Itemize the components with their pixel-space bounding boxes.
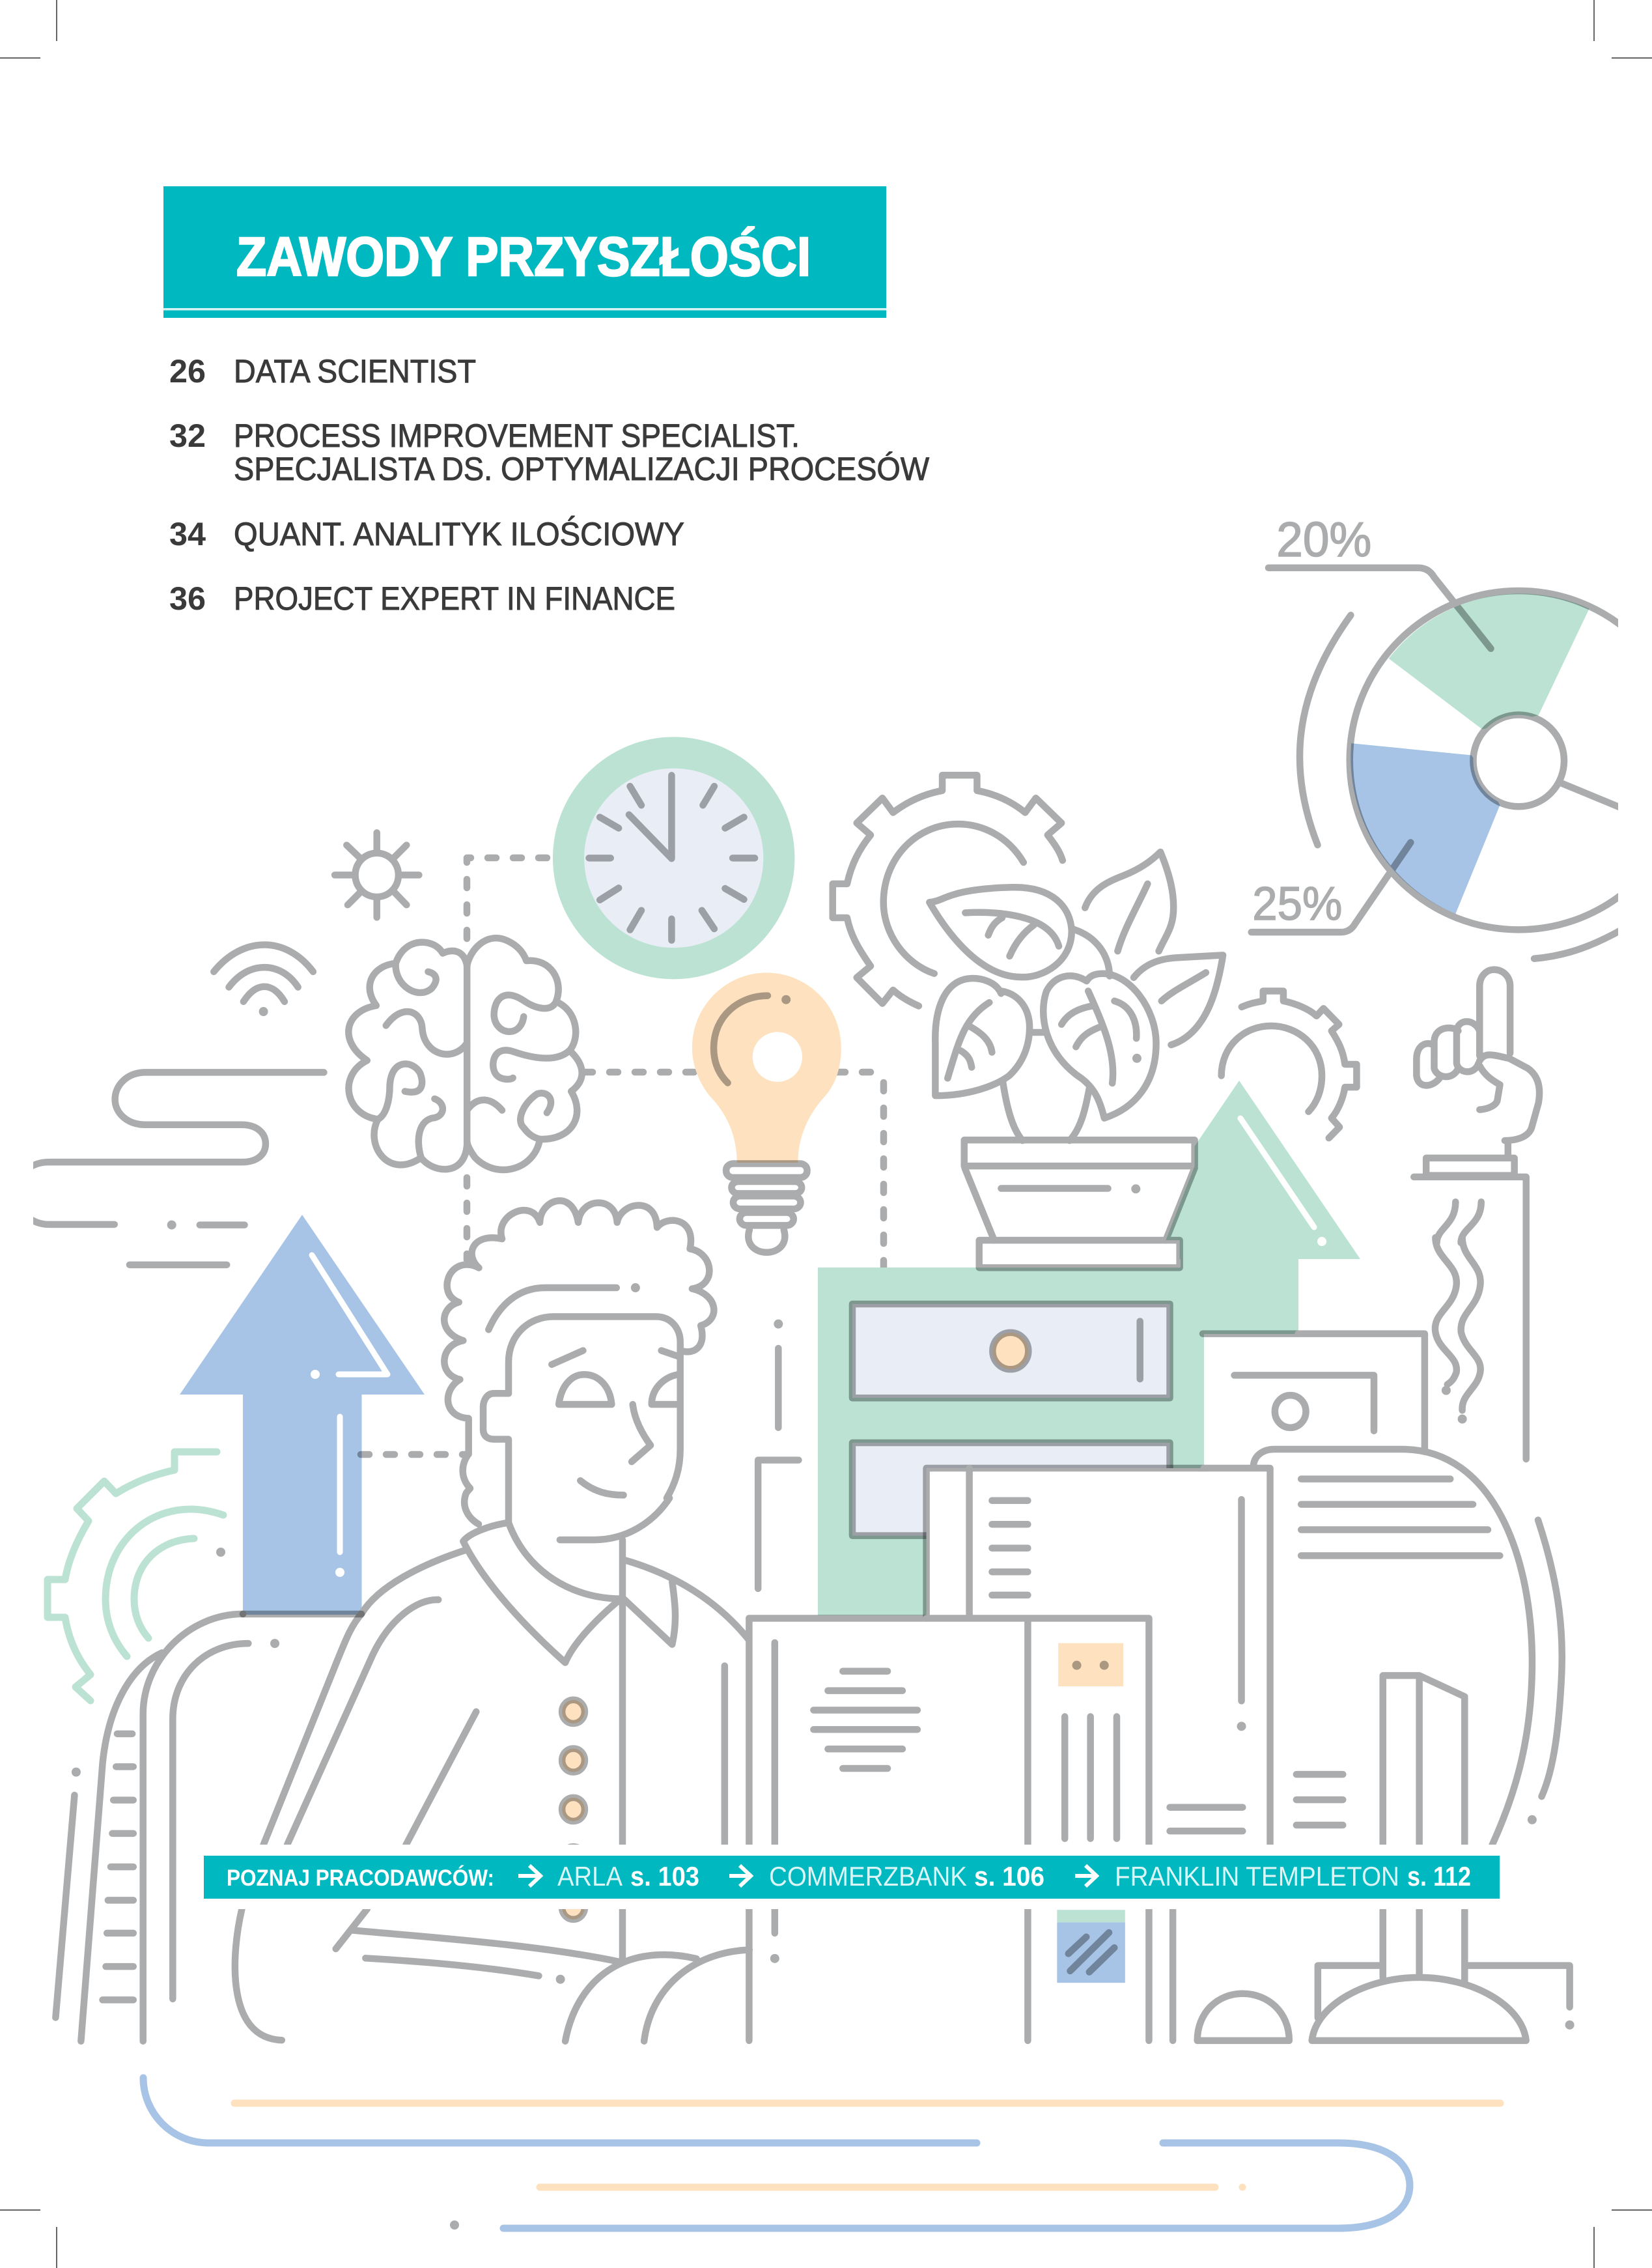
icon: green gear [48, 1452, 223, 1701]
shirt buttons [562, 1700, 585, 1920]
employer Arla: s. 103 [630, 1861, 699, 1892]
light bulb [692, 972, 841, 1253]
upper drawer [852, 1304, 1170, 1398]
torso and collar [235, 1498, 749, 2041]
winding line [16, 1072, 324, 1265]
entry 26: 26 [169, 353, 206, 390]
title: ZAWODY PRZYSZŁOŚCI [236, 226, 811, 287]
arrow 1 [518, 1865, 540, 1886]
blue sector [1351, 743, 1500, 914]
employers banner [204, 1856, 1500, 1899]
background monitor [758, 1324, 1425, 1589]
monitor stand [1197, 1910, 1570, 2041]
entry 32: SPECJALISTA DS. OPTYMALIZACJI PROCESÓW [234, 451, 930, 487]
pot [964, 1140, 1195, 1268]
icon: wifi [214, 945, 313, 1012]
employer Franklin Templeton: s. 112 [1407, 1861, 1471, 1892]
dashed connectors [361, 858, 884, 1454]
icon: small gear [1222, 991, 1356, 1138]
clock [553, 737, 794, 979]
entry 32 [169, 418, 930, 487]
icon: brain [348, 938, 582, 1170]
rounded document [1253, 1449, 1562, 1845]
potted plant [929, 852, 1223, 1268]
blue up arrow [180, 1215, 425, 1615]
employer Commerzbank: COMMERZBANK [769, 1861, 967, 1892]
icon: sun [335, 832, 419, 917]
green sector [1389, 593, 1589, 730]
pointing hand [1414, 970, 1539, 1459]
lower document panel [725, 1619, 1173, 2041]
entry 36: PROJECT EXPERT IN FINANCE [234, 580, 675, 617]
filing cabinet [818, 1268, 1204, 1615]
leaves [929, 852, 1223, 1141]
front document panel [927, 1468, 1270, 1846]
employer Arla: ARLA [557, 1861, 623, 1892]
contents list [169, 353, 930, 617]
employer Arla [557, 1861, 699, 1892]
head and hair [444, 1200, 714, 1498]
chair [55, 1614, 361, 2041]
pie chart [1252, 512, 1652, 959]
person [235, 1200, 749, 2041]
icon: large gear [833, 775, 1063, 1006]
entry 32: PROCESS IMPROVEMENT SPECIALIST. [234, 418, 800, 454]
label 20%: 20% [1276, 512, 1371, 567]
banner label: POZNAJ PRACODAWCÓW: [227, 1865, 494, 1891]
entry 32: 32 [169, 418, 206, 454]
arrow 2 [729, 1865, 751, 1886]
entry 36: 36 [169, 580, 206, 617]
bottom decorative lines [143, 2078, 1500, 2228]
entry 34: 34 [169, 516, 206, 552]
header banner [163, 186, 886, 318]
employer Commerzbank: s. 106 [974, 1861, 1044, 1892]
entry 26: DATA SCIENTIST [234, 353, 476, 390]
employer Franklin Templeton: FRANKLIN TEMPLETON [1115, 1861, 1399, 1892]
arrow 3 [1075, 1865, 1097, 1886]
green up arrow [1118, 1081, 1360, 1334]
smoke squiggles [1435, 1238, 1481, 1419]
label 25%: 25% [1252, 878, 1342, 930]
entry 34: QUANT. ANALITYK ILOŚCIOWY [234, 515, 684, 552]
lower drawer [852, 1443, 1170, 1536]
note orange [1058, 1643, 1123, 1686]
blue note [1057, 1910, 1125, 1922]
